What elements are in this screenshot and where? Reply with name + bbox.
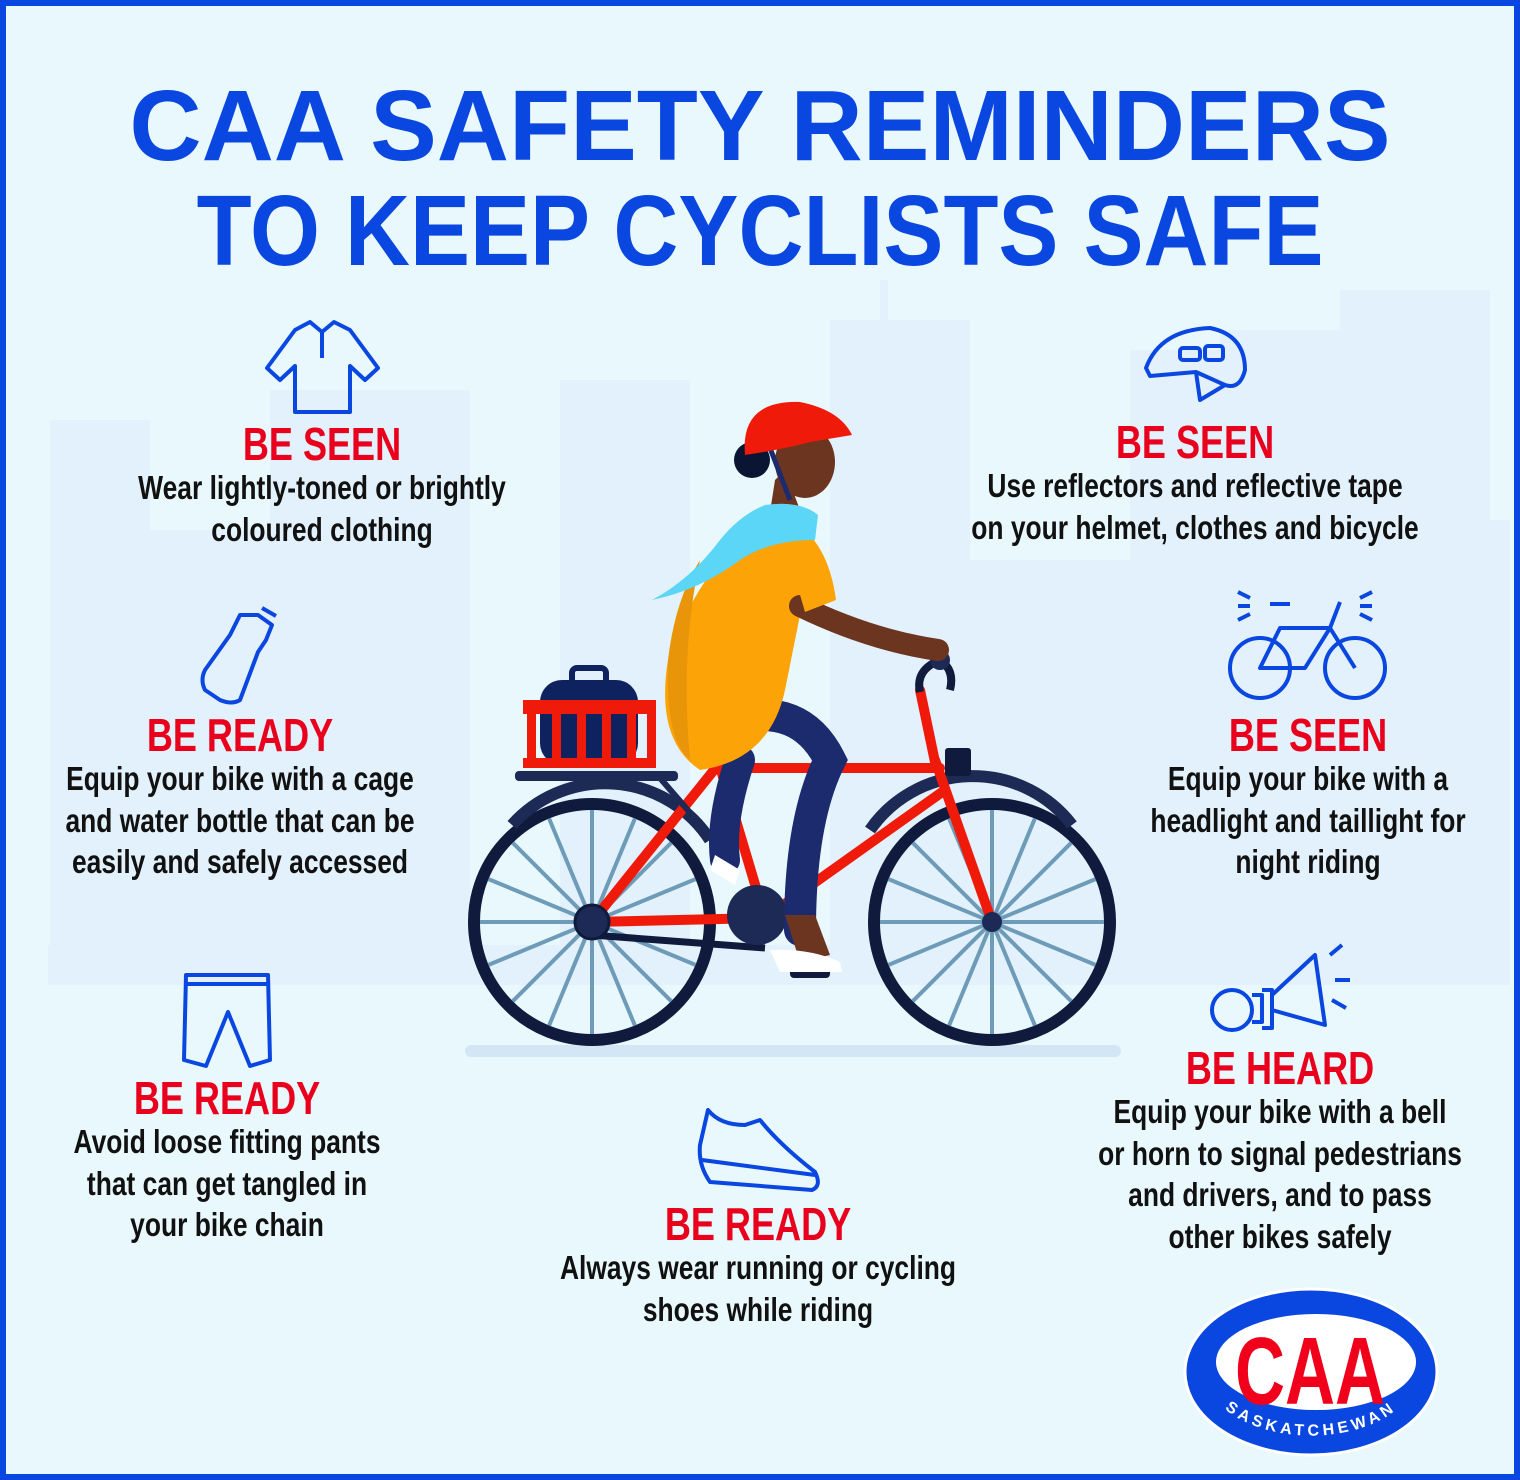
text: be ready pants: your bike chain <box>130 1206 324 1243</box>
text: be seen clothing <box>138 418 506 548</box>
text: be seen reflectors: Use reflectors and reflective tape <box>987 467 1403 504</box>
text: be ready shoes: shoes while riding <box>643 1290 873 1328</box>
text: be heard: or horn to signal pedestrians <box>1098 1134 1462 1172</box>
text: be ready pants <box>73 1072 381 1243</box>
text: be ready shoes: Always wear running or cycling <box>560 1249 956 1286</box>
text: be heard <box>1098 1042 1462 1255</box>
title: CAA SAFETY REMINDERS <box>129 70 1391 182</box>
text: be heard: other bikes safely <box>1168 1218 1392 1254</box>
text: be seen reflectors <box>971 416 1419 546</box>
text: be seen lights: BE SEEN <box>1229 709 1387 761</box>
text: be ready pants: Avoid loose fitting pants <box>73 1123 381 1160</box>
text: be ready shoes <box>560 1198 956 1328</box>
text: be seen reflectors: on your helmet, clothes and bicycle <box>971 508 1419 546</box>
text: be seen clothing: Wear lightly-toned or brightly <box>138 469 506 506</box>
text: be ready water bottle: BE READY <box>147 709 333 761</box>
text: be ready water bottle: Equip your bike with a cage <box>66 760 414 797</box>
logo: CAA Saskatchewan: SASKATCHEWAN <box>1226 1402 1394 1436</box>
text: be heard: Equip your bike with a bell <box>1114 1093 1446 1130</box>
text: be seen lights <box>1150 709 1466 880</box>
title: TO KEEP CYCLISTS SAFE <box>197 175 1323 287</box>
text: be seen reflectors: BE SEEN <box>1116 416 1274 468</box>
text: be seen clothing: BE SEEN <box>243 418 401 470</box>
text: be ready water bottle: easily and safely accessed <box>72 843 408 880</box>
road line <box>465 1045 1121 1057</box>
text: be heard: BE HEARD <box>1186 1042 1374 1094</box>
text: be ready pants: BE READY <box>134 1072 320 1124</box>
text: be seen lights: Equip your bike with a <box>1168 760 1448 797</box>
title <box>129 70 1391 287</box>
text: be ready water bottle <box>65 709 415 880</box>
text: be seen lights: night riding <box>1235 843 1381 880</box>
text: be ready water bottle: and water bottle that can be <box>65 802 415 838</box>
text: be seen lights: headlight and taillight for <box>1150 802 1466 838</box>
logo: CAA Saskatchewan: CAA <box>1235 1318 1385 1425</box>
text: be ready shoes: BE READY <box>665 1198 851 1250</box>
text: be ready pants: that can get tangled in <box>87 1164 367 1202</box>
bicycle <box>474 650 1110 1040</box>
text: be seen clothing: coloured clothing <box>211 510 433 548</box>
cyclist <box>652 402 938 972</box>
text: be heard: and drivers, and to pass <box>1128 1176 1432 1213</box>
